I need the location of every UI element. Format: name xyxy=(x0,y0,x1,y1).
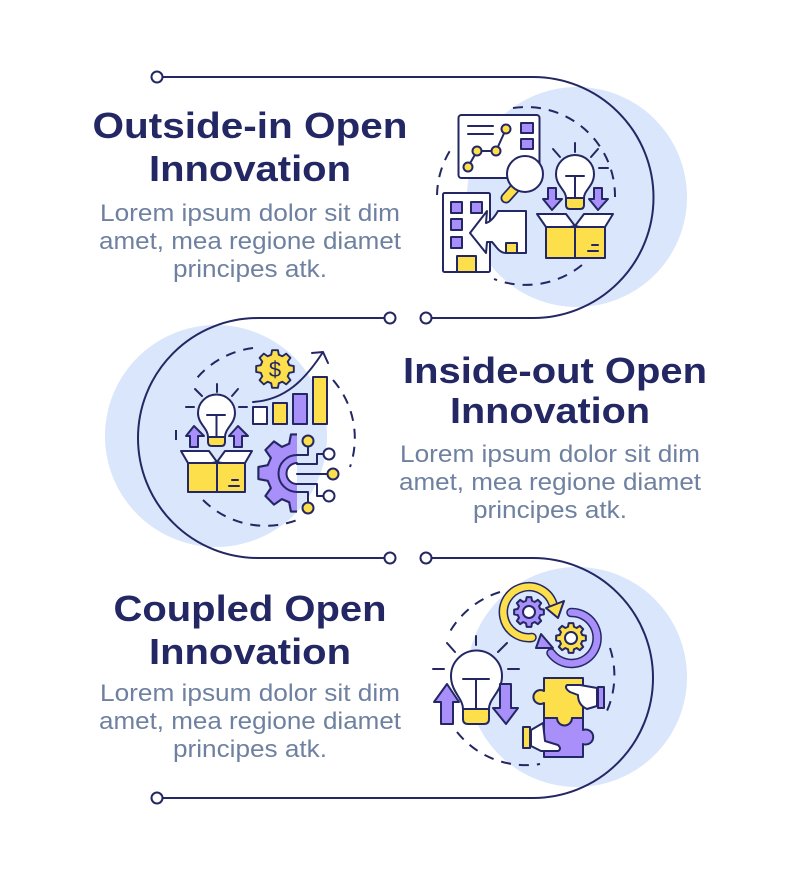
start node xyxy=(152,72,162,82)
description text: Lorem ipsum dolor sit dim xyxy=(100,200,400,227)
lower node xyxy=(152,792,162,804)
dollar gear xyxy=(256,350,294,388)
panel: outside-in open innovation xyxy=(92,72,687,324)
description text: amet, mea regione diamet xyxy=(99,708,401,735)
icon: outside-in composite xyxy=(437,107,615,285)
upper node xyxy=(420,552,432,564)
blue backdrop circle xyxy=(467,87,687,307)
description text: amet, mea regione diamet xyxy=(399,469,701,496)
down arrows xyxy=(543,188,608,210)
open box xyxy=(181,451,252,492)
bar chart xyxy=(253,377,327,424)
description text xyxy=(399,441,701,524)
description text xyxy=(99,680,401,763)
lower node xyxy=(384,552,396,564)
blue backdrop circle xyxy=(467,567,687,787)
dashed orbit xyxy=(437,107,615,285)
magnifier xyxy=(506,156,543,198)
blue backdrop circle xyxy=(105,325,327,547)
chart board xyxy=(458,115,540,178)
lower hand xyxy=(523,723,560,751)
upper node xyxy=(384,312,396,324)
heading: Innovation xyxy=(450,390,650,431)
heading: Innovation xyxy=(149,148,351,189)
panel: coupled open innovation xyxy=(99,552,687,804)
up arrow xyxy=(434,684,459,724)
open box xyxy=(537,214,613,258)
description text xyxy=(99,200,401,283)
yellow gear xyxy=(556,623,586,653)
description text: amet, mea regione diamet xyxy=(99,228,401,255)
heading xyxy=(114,588,386,672)
light bulb xyxy=(186,384,247,446)
connector line xyxy=(138,318,384,558)
heading: Outside-in Open xyxy=(92,105,408,146)
inbound arrow xyxy=(470,211,526,253)
heading xyxy=(403,350,707,431)
heading xyxy=(92,105,408,189)
heading: Innovation xyxy=(149,631,351,672)
heading: Inside-out Open xyxy=(403,350,707,391)
building xyxy=(443,193,490,272)
description text: principes atk. xyxy=(173,736,327,763)
description text: Lorem ipsum dolor sit dim xyxy=(100,680,400,707)
dashed orbit xyxy=(447,592,614,765)
icon: inside-out composite xyxy=(176,348,355,526)
heading: Coupled Open xyxy=(114,588,386,629)
end node xyxy=(420,312,432,324)
down arrow xyxy=(493,684,518,724)
panel: inside-out open innovation xyxy=(105,312,707,564)
description text: Lorem ipsum dolor sit dim xyxy=(400,441,700,468)
circular arrows xyxy=(503,587,597,663)
light bulb xyxy=(553,143,608,209)
connector line xyxy=(163,558,653,798)
light bulb xyxy=(433,636,519,724)
icon: coupled composite xyxy=(433,587,614,765)
tech gear xyxy=(258,434,338,514)
up arrows xyxy=(186,426,248,447)
dollar gear: $ xyxy=(269,357,281,382)
dashed orbit xyxy=(176,348,355,526)
puzzle pieces xyxy=(533,678,593,757)
description text: principes atk. xyxy=(473,497,627,524)
description text: principes atk. xyxy=(173,256,327,283)
upper hand xyxy=(566,685,604,709)
purple gear xyxy=(514,597,544,627)
growth arrow xyxy=(253,352,328,402)
connector line xyxy=(163,77,654,318)
